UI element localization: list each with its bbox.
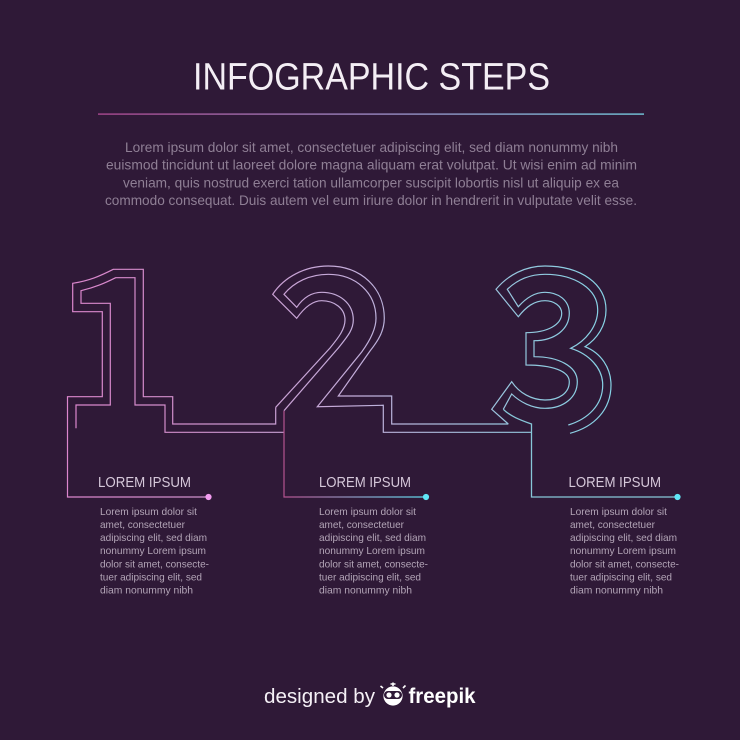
number 2 outline [273, 266, 531, 497]
step 1 text block: nonummy Lorem ipsum [100, 546, 206, 557]
intro text block: euismod tincidunt ut laoreet dolore magna aliquam erat volutpat. Ut wisi enim ad minim [106, 156, 637, 172]
title underline [98, 113, 644, 115]
footer designed by: designed by [264, 685, 376, 708]
step 2 text block [319, 507, 428, 596]
step 1 text block [100, 507, 209, 596]
step 1 heading: LOREM IPSUM [98, 474, 191, 491]
step 1 text block: amet, consectetuer [100, 520, 186, 531]
step 2 text block: nonummy Lorem ipsum [319, 546, 425, 557]
number 1 outline [68, 269, 284, 497]
step 1 text block: tuer adipiscing elit, sed [100, 572, 202, 584]
intro text block: Lorem ipsum dolor sit amet, consectetuer adipiscing elit, sed diam nonummy nibh [125, 139, 618, 155]
intro text block: veniam, quis nostrud exerci tation ullamcorper suscipit lobortis nisl ut aliquip ex ea [123, 174, 619, 190]
step 2 text block: dolor sit amet, consecte- [319, 560, 428, 570]
icon: freepik mascot [380, 682, 406, 706]
step 1 marker dot [205, 494, 212, 500]
step 3 text block [570, 507, 679, 596]
step 1 text block: Lorem ipsum dolor sit [100, 507, 197, 518]
step 2 text block: adipiscing elit, sed diam [319, 533, 426, 544]
step 2 text block: diam nonummy nibh [319, 586, 412, 596]
step 2 text block: Lorem ipsum dolor sit [319, 507, 416, 518]
step 1 text block: diam nonummy nibh [100, 586, 193, 596]
intro text block: commodo consequat. Duis autem vel eum iriure dolor in hendrerit in vulputate velit esse. [105, 192, 637, 208]
step 3 text block: Lorem ipsum dolor sit [570, 507, 667, 518]
step 2 text block: tuer adipiscing elit, sed [319, 572, 421, 584]
number 3 outline [492, 266, 677, 497]
step 2 text block: amet, consectetuer [319, 520, 405, 531]
step 3 text block: tuer adipiscing elit, sed [570, 572, 672, 584]
step 2 marker dot [423, 494, 429, 500]
step 1 text block: dolor sit amet, consecte- [100, 560, 209, 570]
step 3 heading: LOREM IPSUM [568, 474, 661, 491]
footer freepik wordmark: freepik [408, 685, 476, 708]
step 3 text block: nonummy Lorem ipsum [570, 546, 676, 557]
step 3 text block: amet, consectetuer [570, 520, 656, 531]
step 1 text block: adipiscing elit, sed diam [100, 533, 207, 544]
step 3 text block: diam nonummy nibh [570, 586, 663, 596]
step 3 marker dot [674, 494, 681, 500]
step 3 text block: dolor sit amet, consecte- [570, 560, 679, 570]
step 3 text block: adipiscing elit, sed diam [570, 533, 677, 544]
step 2 heading: LOREM IPSUM [319, 474, 411, 491]
intro text block [105, 139, 637, 208]
title: INFOGRAPHIC STEPS [193, 56, 550, 98]
